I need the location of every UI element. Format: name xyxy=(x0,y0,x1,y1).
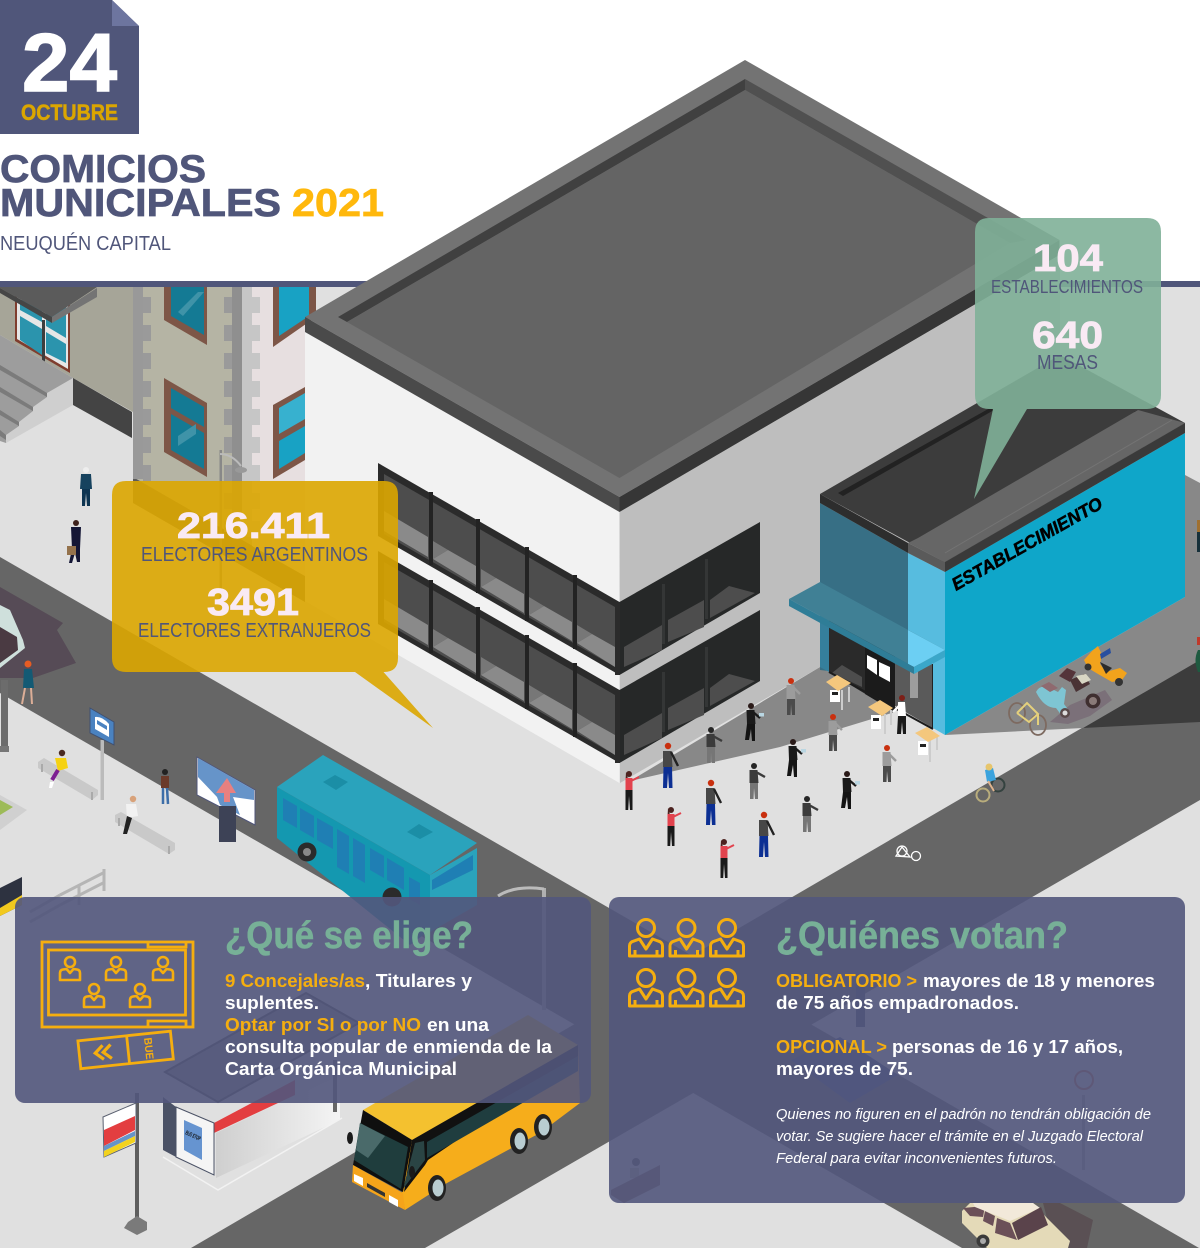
optional voters: mayores de 75. xyxy=(776,1058,913,1079)
left white bus and shadow xyxy=(0,587,76,678)
main building xyxy=(305,60,1060,783)
shelter pad outline xyxy=(163,1118,342,1190)
title: 2021 xyxy=(292,182,384,225)
olive building xyxy=(0,287,133,438)
table 1 xyxy=(826,675,851,710)
road: northwest to southeast xyxy=(0,557,1199,1248)
white kiosk xyxy=(216,1075,340,1178)
roadside sign xyxy=(103,1093,147,1235)
footnote xyxy=(776,1107,1151,1167)
lower windows xyxy=(378,551,760,763)
shadow of blue building xyxy=(945,475,1200,735)
footnote: Federal para evitar inconvenientes futuros. xyxy=(776,1151,1057,1167)
voting tables xyxy=(826,675,940,762)
yellow coach xyxy=(347,1015,580,1210)
optional voters xyxy=(776,1036,1123,1079)
icon: group of voters xyxy=(630,920,744,1006)
ballot ticket xyxy=(78,1031,173,1069)
body copy: Optar por SI o por NO xyxy=(225,1014,421,1035)
queue of voters xyxy=(626,678,896,878)
table 2 xyxy=(868,700,893,734)
roof xyxy=(363,1015,578,1140)
background buildings xyxy=(0,287,316,602)
window: upper left xyxy=(164,287,207,345)
ad panel xyxy=(176,1107,214,1175)
front bumper xyxy=(352,1165,405,1210)
yellow striped corner xyxy=(0,877,22,916)
cream car xyxy=(962,1203,1070,1248)
brown motorcycle xyxy=(1059,668,1100,708)
pole under panel xyxy=(333,1060,337,1112)
left wall xyxy=(305,332,620,783)
stone corner building xyxy=(133,287,305,602)
mirrors xyxy=(347,1132,353,1144)
poll worker in white shirt xyxy=(893,695,906,734)
month: OCTUBRE xyxy=(21,100,118,125)
mandatory voters: OBLIGATORIO > xyxy=(776,970,917,991)
lamp post left xyxy=(0,680,9,752)
billboard xyxy=(197,757,255,842)
street lamp xyxy=(220,450,247,600)
tables number: 640 xyxy=(1032,315,1103,357)
right wall xyxy=(620,255,1060,783)
stairs xyxy=(0,335,73,443)
fence xyxy=(30,869,105,922)
cyclist xyxy=(976,764,1004,802)
entrance xyxy=(820,582,933,729)
foreign electors number: 3491 xyxy=(207,582,299,624)
panel: quienes votan xyxy=(609,897,1185,1203)
bus shelter and street furniture xyxy=(163,993,359,1190)
police officer xyxy=(80,467,92,506)
vehicle shadows by the wall xyxy=(1050,690,1112,724)
roof xyxy=(305,60,1060,512)
header rule xyxy=(0,281,1200,287)
heading: ¿Quiénes votan? xyxy=(776,915,1068,957)
parked bicycle xyxy=(1009,703,1046,735)
body copy: Carta Orgánica Municipal xyxy=(225,1058,457,1079)
heading: ¿Qué se elige? xyxy=(225,915,473,957)
shadow on the road xyxy=(1083,660,1200,728)
blue city bus xyxy=(277,755,477,945)
fence with seated person xyxy=(611,1158,660,1203)
windshield frame xyxy=(353,1110,412,1192)
mandatory voters: mayores de 18 y menores xyxy=(923,970,1155,991)
pale pink building xyxy=(242,287,316,576)
car shadow xyxy=(1043,1203,1093,1248)
walking person xyxy=(856,987,865,1027)
body copy xyxy=(225,970,553,1079)
teal left wall xyxy=(820,503,908,680)
tables label: MESAS xyxy=(1037,352,1098,374)
awning xyxy=(789,582,945,674)
title: MUNICIPALES xyxy=(0,182,281,225)
icon: council chamber and ballot xyxy=(42,942,193,1069)
argentine electors number: 216.411 xyxy=(177,505,330,546)
footnote: Quienes no figuren en el padrón no tendrán obligación de xyxy=(776,1107,1151,1123)
windshield glass xyxy=(354,1123,408,1189)
title xyxy=(0,148,384,225)
optional voters: personas de 16 y 17 años, xyxy=(892,1036,1123,1057)
front side window xyxy=(403,1141,425,1189)
callout: electors xyxy=(112,481,433,728)
bench with woman xyxy=(38,750,98,800)
ground xyxy=(0,287,1200,1248)
callout: establishments xyxy=(974,218,1161,499)
foreign electors label: ELECTORES EXTRANJEROS xyxy=(138,620,371,642)
date number: 24 xyxy=(22,16,117,109)
black window band xyxy=(404,1045,578,1192)
teal scooter xyxy=(1036,682,1070,718)
blue poster xyxy=(184,1120,202,1160)
shadow of main building xyxy=(630,667,895,781)
body copy: en una xyxy=(427,1014,490,1035)
shelter dark side xyxy=(163,1097,176,1157)
side body xyxy=(402,1045,580,1210)
body copy: 9 Concejales/as xyxy=(225,970,365,991)
orange scooter xyxy=(1084,646,1127,686)
no-turn sign xyxy=(1071,1062,1097,1170)
roof of kiosk xyxy=(165,993,359,1102)
planter xyxy=(0,795,27,830)
date tag xyxy=(0,0,139,134)
body copy: suplentes. xyxy=(225,992,319,1013)
optional voters: OPCIONAL > xyxy=(776,1036,887,1057)
title: COMICIOS xyxy=(0,148,206,191)
bicycle at right edge xyxy=(1196,637,1200,672)
table 3 xyxy=(915,727,940,762)
standing woman xyxy=(161,769,169,804)
footnote: votar. Se sugiere hacer el trámite en el Juzgado Electoral xyxy=(776,1129,1144,1145)
body copy: , Titulares y xyxy=(365,970,473,991)
light pillar xyxy=(908,553,945,735)
road: southwest to northeast xyxy=(191,659,1200,1248)
red stripe xyxy=(214,1080,295,1133)
poster text: BUS STOP xyxy=(184,1130,201,1143)
blue establishment building xyxy=(789,355,1185,735)
blue facade xyxy=(945,433,1185,735)
mandatory voters: de 75 años empadronados. xyxy=(776,992,1019,1013)
body copy: consulta popular de enmienda de la xyxy=(225,1036,553,1057)
upper windows xyxy=(378,463,760,675)
panel: que se elige xyxy=(15,897,591,1103)
blue roof xyxy=(820,355,1185,572)
bench with man xyxy=(115,796,175,854)
lamp under panel xyxy=(498,888,546,1010)
headlights and grille xyxy=(354,1174,398,1207)
bus stop sign xyxy=(90,708,114,800)
establishments label: ESTABLECIMIENTOS xyxy=(991,277,1143,297)
subtitle: NEUQUÉN CAPITAL xyxy=(0,232,171,255)
side windows xyxy=(427,1056,578,1158)
wheels xyxy=(428,1175,446,1201)
blue car xyxy=(791,1037,898,1103)
person at right edge xyxy=(1197,520,1200,552)
bicycle road marking xyxy=(896,846,920,860)
window: lower left xyxy=(164,378,207,477)
woman in teal dress xyxy=(22,660,34,704)
building label: ESTABLECIMIENTO xyxy=(948,493,1106,594)
mandatory voters xyxy=(776,970,1155,1013)
ticket text: BUE xyxy=(141,1037,155,1060)
argentine electors label: ELECTORES ARGENTINOS xyxy=(141,544,368,566)
businessman with briefcase xyxy=(67,520,81,563)
establishments number: 104 xyxy=(1033,238,1103,280)
